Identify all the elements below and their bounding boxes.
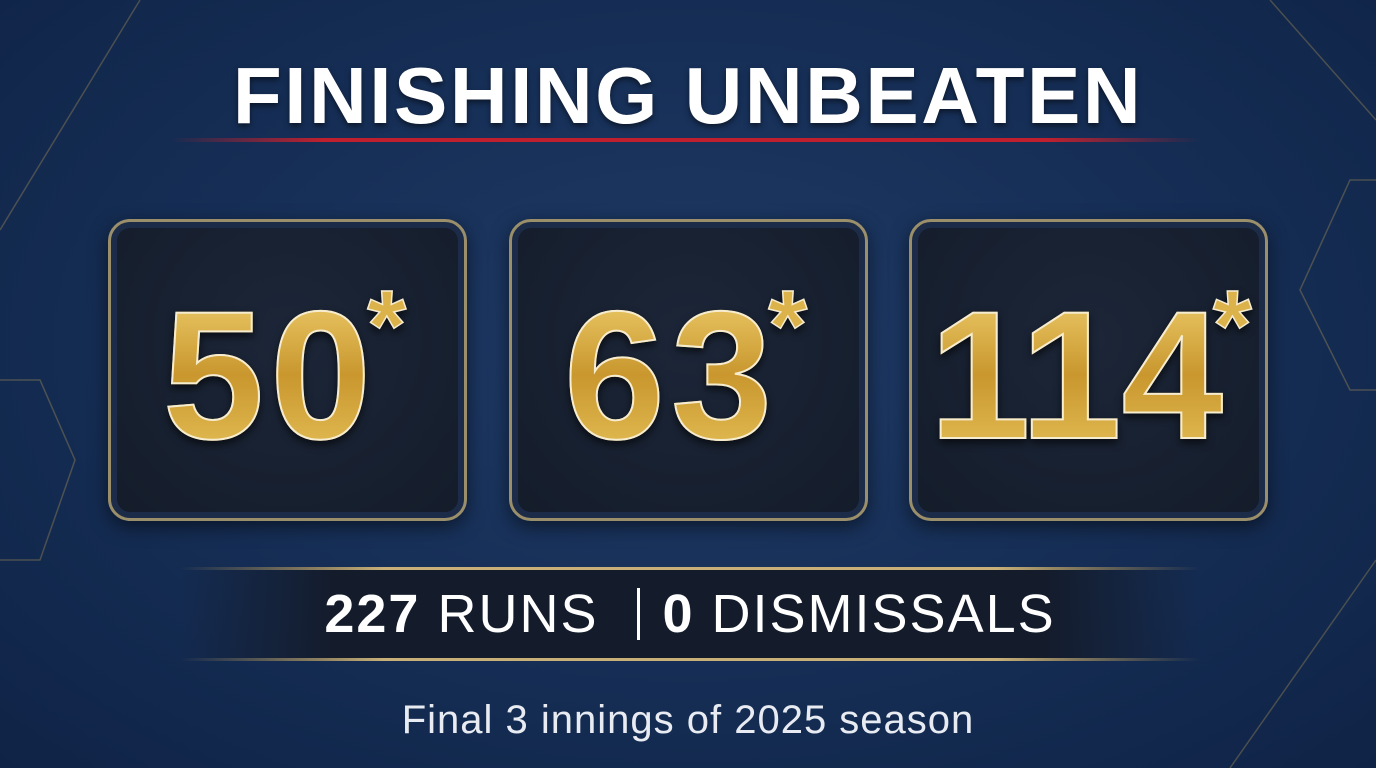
red underline (170, 138, 1200, 142)
subtitle: Final 3 innings of 2025 season (402, 698, 974, 742)
card: 63*: 63* (564, 270, 813, 477)
card: 114*: 114* (929, 270, 1252, 477)
title: FINISHING UNBEATEN (233, 51, 1143, 140)
card: 63* (509, 219, 868, 521)
card: 114* (909, 219, 1268, 521)
summary text: 227 RUNS 0 DISMISSALS (324, 584, 1056, 644)
summary band (180, 567, 1200, 661)
card: 50* (108, 219, 467, 521)
card: 50*: 50* (163, 270, 412, 477)
